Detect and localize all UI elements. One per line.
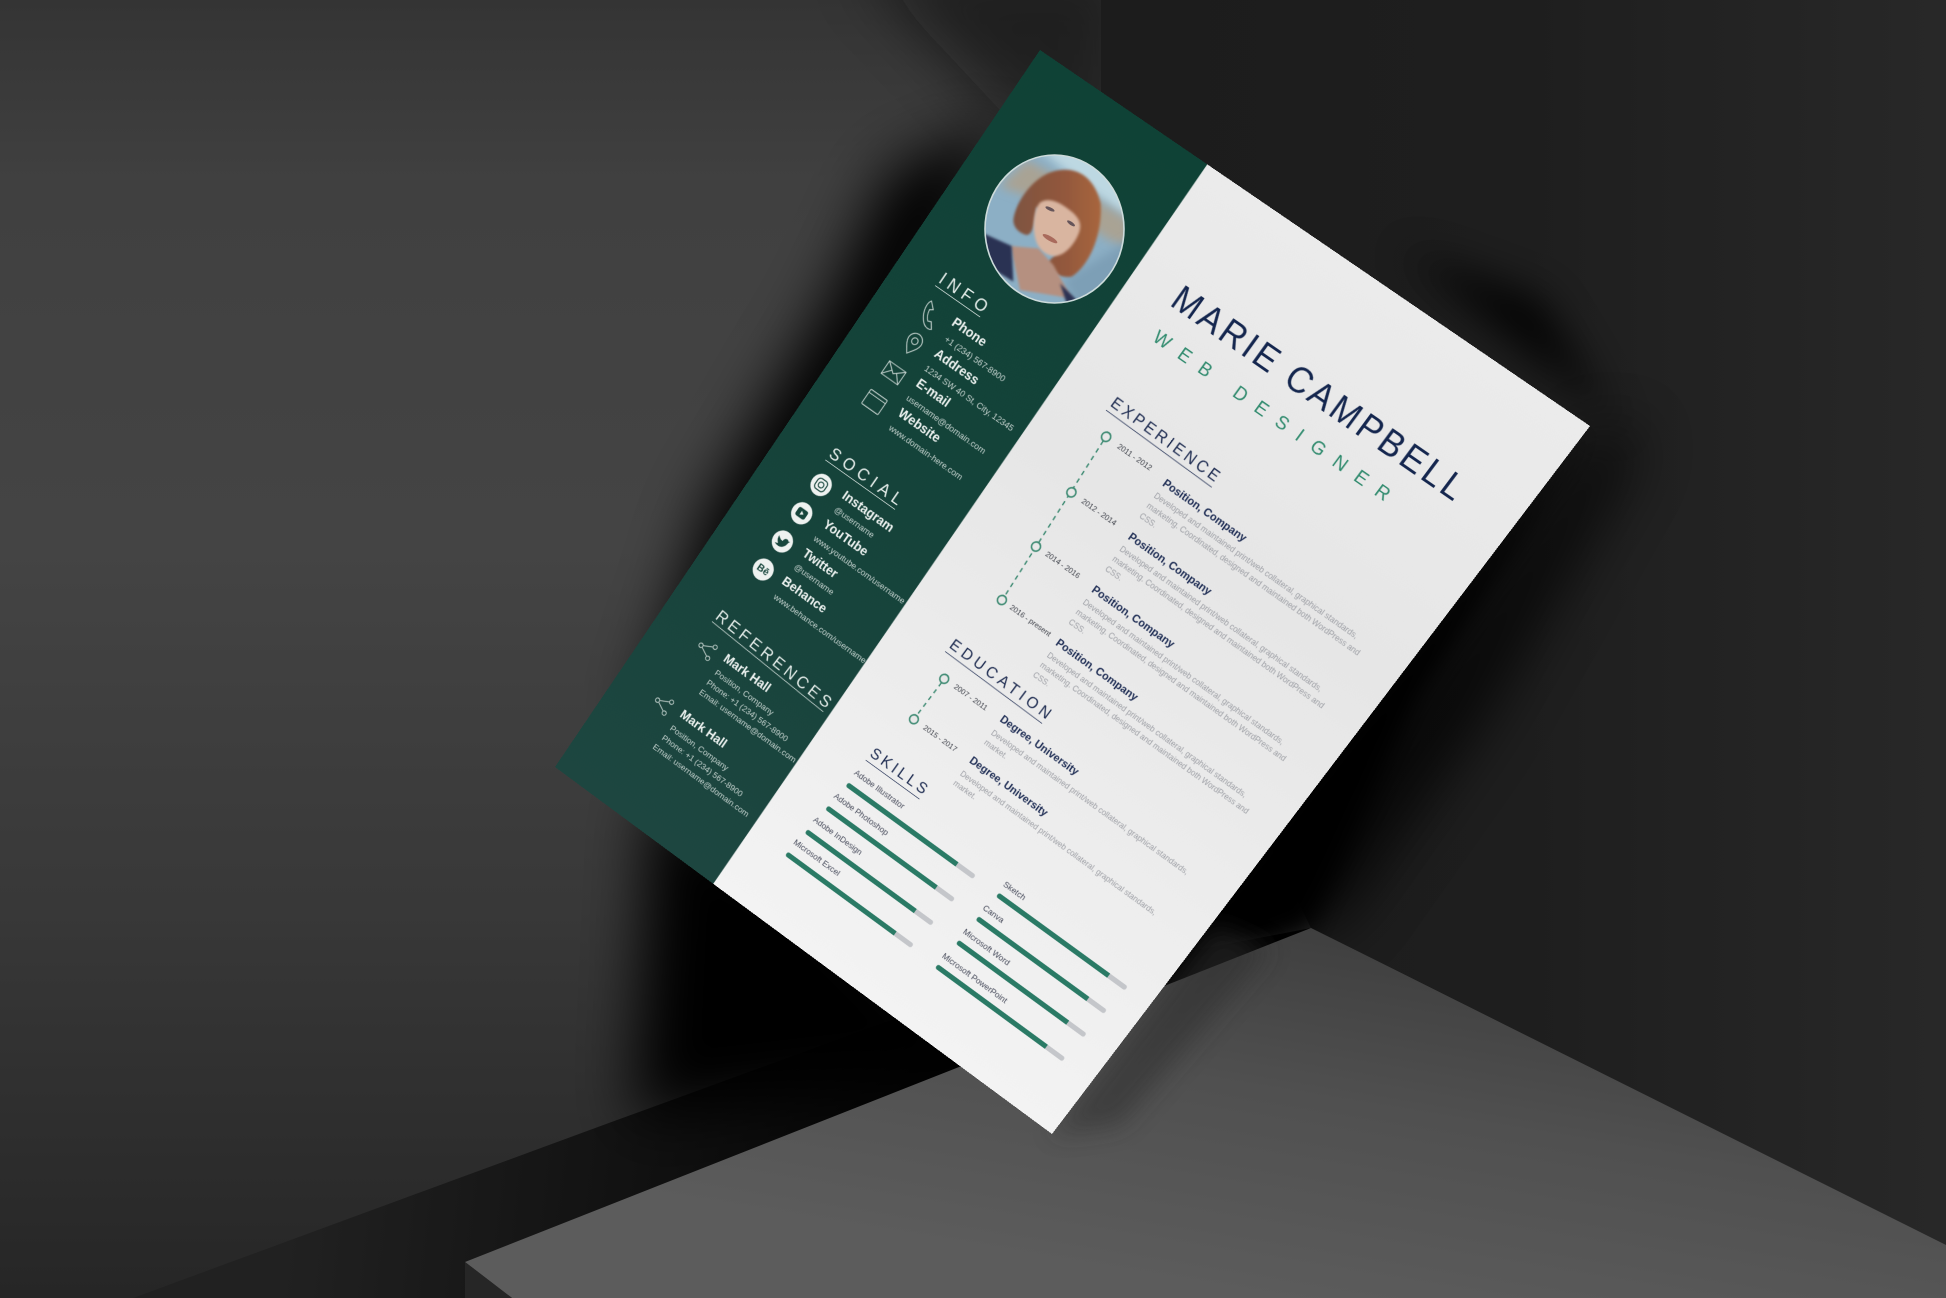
job 3 description: Developed and maintained print/web collateral, graphical standards, bbox=[1081, 597, 1286, 747]
job 1 description: CSS. bbox=[1138, 511, 1159, 530]
degree 1 description: Developed and maintained print/web collateral, graphical standards, bbox=[989, 728, 1190, 877]
social: youtube url: www.youtube.com/username bbox=[812, 533, 907, 606]
heading: info: INFO bbox=[935, 268, 996, 320]
degree 2 description: Developed and maintained print/web collateral, graphical standards, bbox=[958, 769, 1158, 917]
icon: envelope bbox=[880, 360, 907, 386]
icon: browser window bbox=[861, 388, 888, 416]
social: twitter: Twitter bbox=[800, 546, 840, 581]
box left face bbox=[465, 1262, 512, 1298]
panel: green sidebar bbox=[555, 50, 1208, 884]
bar: adobe indesign bbox=[805, 830, 934, 925]
reference 2: name: Mark Hall bbox=[677, 707, 729, 751]
heading: social: SOCIAL bbox=[826, 443, 910, 512]
shadow at paper lower right edge bbox=[1240, 430, 1640, 930]
contact: website value: www.domain-here.com bbox=[887, 423, 965, 482]
shadow behind paper left edge bbox=[640, 120, 1010, 760]
box top surface bbox=[465, 928, 1946, 1298]
job 2 description: Developed and maintained print/web collateral, graphical standards, bbox=[1118, 544, 1324, 694]
contact: address: Address bbox=[931, 346, 982, 388]
paper contact shadow on box bbox=[1052, 925, 1270, 1134]
degree 1 title: Degree, University bbox=[998, 713, 1081, 778]
icon: share 2 bbox=[654, 697, 674, 716]
label: microsoft powerpoint: Microsoft PowerPoint bbox=[940, 951, 1009, 1005]
job 1 description: Developed and maintained print/web collateral, graphical standards, bbox=[1152, 491, 1360, 641]
job 4 description: CSS. bbox=[1031, 670, 1052, 688]
title: name: MARIE CAMPBELL bbox=[1164, 278, 1476, 510]
date 1: 2011 - 2012 bbox=[1116, 441, 1154, 473]
reference 2: position: Position, Company bbox=[668, 723, 730, 773]
reference 1: email: Email: username@domain.com bbox=[697, 687, 798, 765]
icon: behance bbox=[752, 558, 808, 607]
label: adobe photoshop: Adobe Photoshop bbox=[832, 791, 891, 837]
degree 2 title: Degree, University bbox=[967, 754, 1050, 819]
heading: education: EDUCATION bbox=[946, 636, 1058, 725]
job 1 title: Position, Company bbox=[1160, 477, 1249, 545]
job 2 description: CSS. bbox=[1103, 564, 1124, 583]
bar: microsoft powerpoint bbox=[935, 964, 1064, 1061]
bar: adobe photoshop bbox=[826, 806, 954, 902]
label: adobe illustrator: Adobe Illustrator bbox=[852, 768, 907, 811]
reference 1: position: Position, Company bbox=[713, 668, 776, 717]
resume paper bbox=[555, 50, 1590, 1134]
bar: adobe illustrator bbox=[846, 782, 975, 878]
social: behance: Behance bbox=[779, 574, 829, 616]
job 2 title: Position, Company bbox=[1126, 530, 1214, 598]
heading: skills: SKILLS bbox=[867, 745, 933, 800]
wall seam and darker lower plane bbox=[133, 928, 1311, 1298]
label: sketch: Sketch bbox=[1001, 879, 1028, 902]
chart: education timeline bbox=[908, 673, 950, 725]
chart: experience timeline bbox=[996, 430, 1112, 606]
social: youtube: YouTube bbox=[820, 517, 871, 559]
label: canva: Canva bbox=[981, 903, 1006, 925]
bar: microsoft excel bbox=[786, 852, 913, 948]
job 4 title: Position, Company bbox=[1053, 636, 1141, 703]
icon: share 1 bbox=[698, 622, 738, 662]
shadow at paper top right edge bbox=[1400, 250, 1625, 440]
heading: references: REFERENCES bbox=[712, 606, 839, 714]
icon: twitter bbox=[771, 530, 794, 553]
job 3 title: Position, Company bbox=[1089, 583, 1177, 650]
reference 1: phone: Phone: +1 (234) 567-8900 bbox=[705, 678, 790, 744]
contact: website: Website bbox=[895, 406, 943, 446]
shadow under paper bbox=[635, 790, 1060, 1120]
wall darkening near corner bbox=[860, 0, 1130, 180]
job 3 description: CSS. bbox=[1067, 617, 1088, 636]
label: microsoft excel: Microsoft Excel bbox=[792, 837, 842, 878]
date 3: 2014 - 2016 bbox=[1044, 549, 1082, 580]
date 4: 2016 - present bbox=[1008, 603, 1053, 638]
job 1 description: marketing. Coordinated, designed and maintained both WordPress and bbox=[1145, 501, 1362, 658]
reference 2: phone: Phone: +1 (234) 567-8900 bbox=[660, 733, 745, 799]
reference 2: email: Email: username@domain.com bbox=[651, 742, 751, 819]
label: microsoft word: Microsoft Word bbox=[961, 927, 1012, 967]
social: instagram: Instagram bbox=[839, 488, 897, 535]
contact: phone: Phone bbox=[949, 315, 989, 350]
reference 1: name: Mark Hall bbox=[721, 652, 773, 695]
right wall bbox=[1101, 0, 1946, 1245]
bar: sketch bbox=[996, 893, 1127, 990]
social: behance url: www.behance.com/username bbox=[772, 592, 868, 665]
degree 2 description: market. bbox=[952, 779, 978, 801]
contact: phone value: +1 (234) 567-8900 bbox=[943, 334, 1008, 384]
portrait photo bbox=[984, 154, 1125, 304]
social: twitter handle: @username bbox=[792, 562, 836, 597]
job 4 description: Developed and maintained print/web collateral, graphical standards, bbox=[1045, 650, 1249, 799]
contact: e-mail: E-mail bbox=[913, 376, 953, 410]
date: education 2: 2015 - 2017 bbox=[921, 723, 959, 754]
degree 1 description: market. bbox=[982, 738, 1009, 761]
icon: youtube bbox=[790, 502, 813, 525]
bar: microsoft word bbox=[956, 940, 1086, 1037]
icon: location pin bbox=[906, 332, 924, 354]
label: adobe indesign: Adobe InDesign bbox=[812, 815, 864, 857]
dark wedge right of paper bbox=[1120, 426, 1590, 1000]
heading: experience: EXPERIENCE bbox=[1107, 394, 1226, 487]
icon: behance: Bē bbox=[791, 588, 808, 607]
bar: canva bbox=[976, 916, 1106, 1014]
date: education 1: 2007 - 2011 bbox=[952, 682, 990, 712]
contact: address value: 1234 SW 40 St, City, 12345 bbox=[922, 363, 1016, 433]
job 2 description: marketing. Coordinated, designed and maintained both WordPress and bbox=[1111, 554, 1326, 710]
job 4 description: marketing. Coordinated, designed and maintained both WordPress and bbox=[1038, 660, 1251, 816]
job 3 description: marketing. Coordinated, designed and maintained both WordPress and bbox=[1074, 607, 1288, 763]
subtitle: role: WEB DESIGNER bbox=[1149, 326, 1406, 512]
icon: phone bbox=[922, 300, 934, 330]
icon: instagram bbox=[810, 473, 832, 496]
social: instagram handle: @username bbox=[832, 504, 876, 540]
contact: e-mail value: username@domain.com bbox=[904, 393, 988, 456]
date 2: 2012 - 2014 bbox=[1080, 496, 1119, 528]
